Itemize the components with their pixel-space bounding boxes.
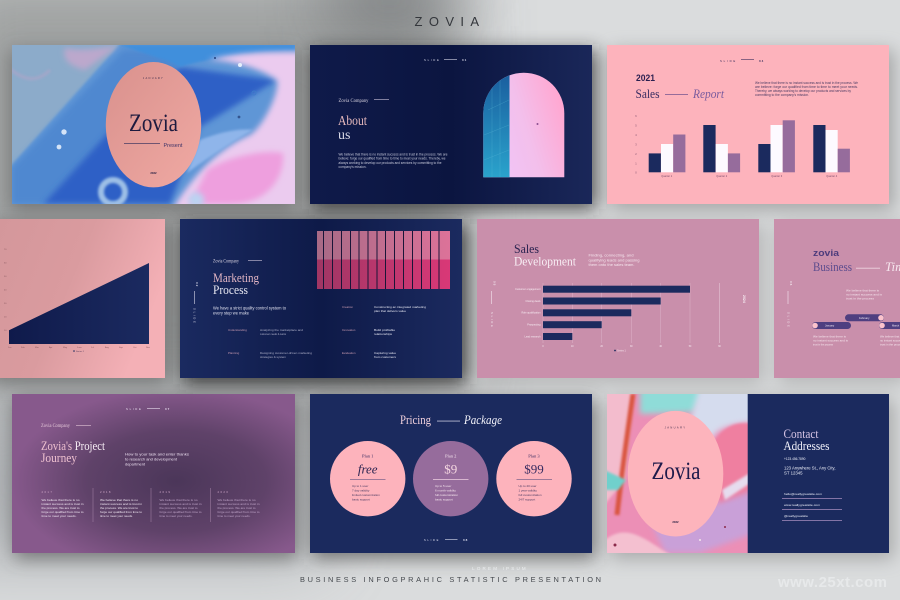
plan 2 circle: [413, 441, 488, 516]
paragraph: [755, 81, 858, 97]
timeline columns: forge our qualified from time to: [100, 510, 142, 514]
heading: Report: [692, 86, 724, 101]
slide 6: sales development: [477, 219, 759, 378]
intro text: [588, 254, 640, 267]
cover title: Zovia: [129, 110, 178, 137]
horizontal bar chart: 10: [571, 346, 574, 348]
process table: plan that delivers value: [374, 309, 406, 313]
contact details: www.reallygreatsite.com: [784, 503, 821, 507]
subheading: [213, 306, 287, 316]
plan 2 circle: 6 month validity: [435, 488, 456, 492]
heading: Pricing: [400, 412, 431, 427]
slide number: 04: [759, 59, 764, 63]
company label: [41, 424, 91, 429]
timeline columns: 2020: [218, 490, 229, 494]
plan 2 circle: Up to 5 user: [435, 484, 451, 488]
heading: [338, 114, 367, 143]
paragraph: [338, 152, 448, 169]
timeline columns: time to meet your needs.: [100, 514, 133, 518]
subheading: We have a strict quality control system to: [213, 306, 287, 310]
slide 2: about us: [310, 45, 592, 204]
timeline intro: trust in the process: [846, 296, 875, 300]
slide 5: marketing process: [180, 219, 462, 378]
plan 1 circle: Up to 1 user: [352, 484, 368, 488]
slide 9: pricing package: [310, 394, 592, 553]
intro text: [125, 452, 189, 466]
bar chart: Quarter 1: [661, 174, 673, 178]
timeline columns: forge our qualified from time to: [218, 510, 260, 514]
heading: About: [338, 114, 367, 129]
bar chart: 3: [635, 142, 637, 146]
timeline columns: We believe that there is no: [218, 498, 256, 502]
slide number: [424, 538, 468, 542]
vertical slide number: SLIDE: [786, 312, 790, 329]
timeline columns: instant success and is trust in: [218, 502, 260, 506]
heading: Business: [813, 259, 852, 274]
timeline intro: no instant success and is: [846, 292, 883, 296]
vertical slide number: [788, 281, 792, 327]
bar chart: 4: [635, 133, 637, 137]
plan 1 circle: 7 day validity: [352, 488, 370, 492]
timeline pills: March: [892, 324, 900, 328]
heading: [514, 241, 576, 268]
intro text: qualifying leads and passing: [588, 258, 640, 262]
horizontal bar chart: Lead research: [525, 335, 541, 338]
bar chart: Quarter 3: [771, 174, 783, 178]
heading: Package: [463, 412, 502, 427]
axis labels: 20: [4, 316, 7, 318]
heading: Contact: [784, 426, 819, 441]
brand: zovia: [813, 248, 840, 259]
slide number: 07: [165, 407, 170, 411]
heading: Development: [514, 254, 576, 268]
axis labels: Apr: [49, 346, 53, 349]
heading: [213, 270, 259, 297]
vertical slide number: [192, 282, 199, 325]
bar chart: Quarter 2: [716, 174, 728, 178]
process table: Innovation: [342, 328, 356, 332]
heading: us: [338, 128, 350, 143]
slide 1: marble cover: [12, 45, 295, 204]
axis labels: [4, 249, 151, 349]
horizontal bar chart: [515, 283, 721, 348]
timeline pills: January: [825, 324, 835, 328]
slide number: [720, 59, 764, 63]
process table: Understanding: [228, 328, 247, 332]
horizontal bar chart: 40: [659, 346, 663, 348]
intro text: to research and development: [125, 458, 178, 462]
heading: [813, 262, 900, 271]
axis labels: 60: [4, 262, 7, 264]
heading: Marketing: [213, 270, 259, 285]
process table: [228, 305, 426, 359]
badge label: JANUARY: [143, 76, 164, 80]
timeline columns: instant success and is trust in: [100, 502, 142, 506]
plan 1 circle: free: [358, 462, 378, 476]
plan 3 circle: 24/7 support: [518, 498, 535, 502]
paragraph: We believe that there is no instant success and is trust in the process. We: [755, 81, 858, 85]
horizontal bar chart: Closing deals: [525, 300, 541, 303]
year: 2021: [636, 73, 655, 83]
title: ZOVIA: [414, 14, 486, 29]
rotated year: 2024: [742, 295, 746, 303]
process table: Designing customer-driven marketing: [260, 351, 312, 355]
heading: Sales: [514, 241, 539, 256]
horizontal bar chart: Prospecting: [527, 324, 541, 326]
vertical slide number: 05: [492, 281, 496, 286]
process table: customers needs & wants: [260, 332, 286, 336]
contact details: ST 12345: [784, 470, 803, 475]
process table: strategies & system: [260, 355, 287, 359]
timeline pills: February: [859, 316, 870, 320]
axis labels: Feb: [21, 347, 26, 349]
plan 2 circle: basic support: [435, 498, 453, 502]
timeline columns: forge our qualified from time to: [42, 510, 84, 514]
paragraph: are believe: forge our qualified from time to time to meet your needs.: [755, 85, 858, 89]
axis labels: May: [63, 347, 68, 349]
bar chart: 0: [635, 170, 637, 174]
oval badge: [106, 62, 201, 187]
contact details: @reallygreatsite: [784, 514, 808, 518]
oval badge: [628, 411, 723, 536]
paragraph: believe: forge our qualified from time to time to meet your needs. Thereby, we: [338, 157, 446, 161]
legend: Series 1: [617, 350, 626, 352]
axis labels: Oct: [133, 346, 137, 349]
timeline columns: the process. We are trust to: [160, 506, 198, 510]
contact details: hello@reallygreatsite.com: [784, 492, 823, 496]
horizontal bar chart: Customer engagement: [515, 288, 541, 291]
axis labels: Nov: [146, 347, 151, 349]
timeline intro: [846, 290, 882, 300]
horizontal bar chart: 0: [542, 346, 544, 348]
process table: Creation: [342, 305, 353, 309]
process table: Constructing an integrated marketing: [374, 305, 426, 309]
timeline text: no instant success and is: [813, 338, 849, 342]
contact details: 123 Anywhere St., Any City,: [784, 466, 836, 470]
striped image: [317, 231, 450, 289]
heading: Zovia's Project: [41, 438, 105, 453]
legend: Series 1: [76, 350, 85, 353]
plan 1 circle: basic support: [352, 498, 370, 502]
timeline columns: We believe that there is no: [100, 498, 138, 502]
heading: [784, 426, 830, 453]
badge year: 2022: [672, 520, 679, 524]
heading: Addresses: [784, 438, 830, 453]
timeline text: We believe that there is: [813, 334, 847, 338]
timeline columns: the process. We are trust to: [42, 506, 80, 510]
navy panel: [748, 394, 889, 553]
slide number: 01: [462, 58, 467, 62]
divider lines: [782, 498, 842, 521]
bar chart: 6: [635, 114, 637, 118]
marble image: [607, 394, 748, 553]
company label: [213, 260, 262, 264]
paragraph: always working to develop our products and services by committing to the: [338, 161, 442, 165]
axis labels: 40: [4, 290, 7, 292]
badge year: 2022: [150, 171, 157, 175]
slide number: SLIDE: [720, 59, 737, 63]
timeline columns: time to meet your needs.: [160, 514, 193, 518]
timeline text: trust in the process: [813, 342, 833, 346]
slide 4: area chart: [0, 219, 165, 378]
bottom caption: BUSINESS INFOGPRAHIC STATISTIC PRESENTATION: [300, 575, 601, 584]
timeline text: [813, 336, 900, 346]
timeline columns: 2017: [42, 490, 53, 494]
timeline columns: We believe that there is no: [160, 498, 198, 502]
paragraph: We believe that there is no instant success and is trust in the process. We are: [338, 152, 448, 156]
process table: relationships: [374, 332, 393, 336]
plan 3 circle: $99: [524, 462, 544, 476]
plan 1 circle: Plan 1: [362, 454, 373, 458]
slide 8: project journey: [12, 394, 295, 553]
timeline columns: [42, 488, 260, 522]
vertical slide number: SLIDE: [192, 308, 196, 325]
plan 2 circle: Plan 2: [445, 454, 456, 458]
slide 3: sales report: [607, 45, 889, 204]
bar chart: [635, 114, 850, 178]
timeline columns: forge our qualified from time to: [160, 510, 202, 514]
plan 2 circle: full customization: [435, 493, 458, 497]
vertical slide number: [490, 281, 496, 329]
axis labels: Mar: [35, 346, 39, 349]
timeline columns: instant success and is trust in: [160, 502, 202, 506]
paragraph: Thereby, we always working to develop our products and services by: [755, 89, 851, 93]
timeline columns: We believe that there is no: [42, 498, 80, 502]
company label: Zovia Company: [338, 98, 369, 104]
watermark: www.25xt.com: [777, 574, 887, 591]
contact details: +123.456.7890: [784, 457, 806, 461]
slide number: 08: [463, 538, 468, 542]
plan 2 circle: $9: [444, 462, 457, 476]
heading: [636, 86, 724, 101]
heading: Process: [213, 282, 248, 297]
process table: Build profitable: [374, 328, 395, 332]
plan 3 circle: 1 year validity: [518, 488, 537, 492]
marble background: [12, 45, 295, 204]
horizontal bar chart: Role qualification: [521, 312, 541, 315]
badge label: JANUARY: [665, 426, 686, 430]
timeline intro: We believe that there is: [846, 288, 880, 292]
timeline columns: time to meet your needs.: [42, 514, 77, 518]
axis labels: Jul: [91, 347, 94, 349]
vertical slide number: 06: [789, 281, 793, 286]
axis labels: 10: [4, 330, 7, 332]
timeline columns: the process. We are trust to: [100, 506, 138, 510]
badge subtitle: Present: [164, 143, 183, 149]
vertical slide number: SLIDE: [490, 312, 494, 329]
slide number: [424, 58, 467, 62]
timeline pills: [812, 314, 900, 329]
plan 3 circle: Up to 20 user: [518, 484, 537, 488]
process table: Planning: [228, 351, 240, 355]
axis labels: 50: [4, 276, 7, 278]
timeline columns: time to meet your needs.: [218, 514, 251, 518]
company label: Zovia Company: [41, 424, 70, 429]
contact details: [784, 457, 836, 518]
axis labels: Aug: [105, 346, 110, 349]
subheading: every step we make: [213, 310, 250, 316]
plan 1 circle: limited customization: [352, 493, 380, 497]
faint caption: LOREM IPSUM: [472, 566, 528, 571]
slide number: SLIDE: [424, 538, 440, 542]
badge rule: [124, 143, 160, 144]
bar chart: 5: [635, 124, 637, 128]
heading: Sales: [636, 86, 660, 101]
timeline columns: the process. We are trust to: [218, 506, 256, 510]
plan 3 circle: Plan 3: [528, 454, 540, 458]
horizontal bar chart: 30: [630, 346, 633, 348]
plan 3 circle: full customization: [518, 493, 542, 497]
axis labels: 30: [4, 303, 7, 305]
bar chart: 2: [635, 152, 637, 156]
bar chart: Quarter 4: [826, 174, 838, 178]
heading: [41, 438, 105, 465]
intro text: How to your task and enter thanks: [125, 452, 189, 456]
axis labels: June: [77, 347, 83, 349]
slide number: SLIDE: [424, 58, 441, 62]
plan 1 circle: [330, 441, 405, 516]
process table: Evaluation: [342, 351, 356, 355]
heading: [400, 412, 502, 427]
legend: [73, 350, 85, 353]
timeline columns: 2019: [160, 490, 171, 494]
slide number: [126, 407, 170, 411]
paragraph: company's mission.: [338, 165, 367, 169]
horizontal bar chart: 50: [689, 346, 692, 348]
arch image: [483, 73, 564, 177]
bar chart: 1: [635, 161, 637, 165]
slide number: SLIDE: [126, 407, 143, 411]
process table: Capturing value: [374, 351, 396, 355]
slide 10: contact: [607, 394, 889, 553]
company label: Zovia Company: [213, 260, 239, 264]
timeline columns: 2018: [100, 490, 112, 494]
area shape: [9, 263, 149, 344]
horizontal bar chart: 60: [718, 346, 721, 348]
horizontal bar chart: 20: [600, 346, 604, 348]
slide 7: business timeline: [774, 219, 900, 378]
axis labels: 70: [4, 249, 7, 251]
intro text: Finding, connecting, and: [588, 254, 634, 258]
axis labels: Sep: [119, 347, 124, 349]
axis labels: Jan: [8, 347, 12, 349]
cover title: Zovia: [652, 458, 700, 485]
process table: Analyzing the marketplace and: [260, 328, 303, 332]
intro text: them onto the sales team.: [588, 263, 634, 267]
heading: Journey: [41, 450, 77, 465]
vertical slide number: 02: [195, 282, 199, 287]
process table: from customers: [374, 355, 397, 359]
timeline columns: instant success and is trust in: [42, 502, 84, 506]
paragraph: committing to the company's mission.: [755, 93, 809, 97]
plan 3 circle: [496, 441, 572, 516]
intro text: department: [125, 462, 146, 466]
